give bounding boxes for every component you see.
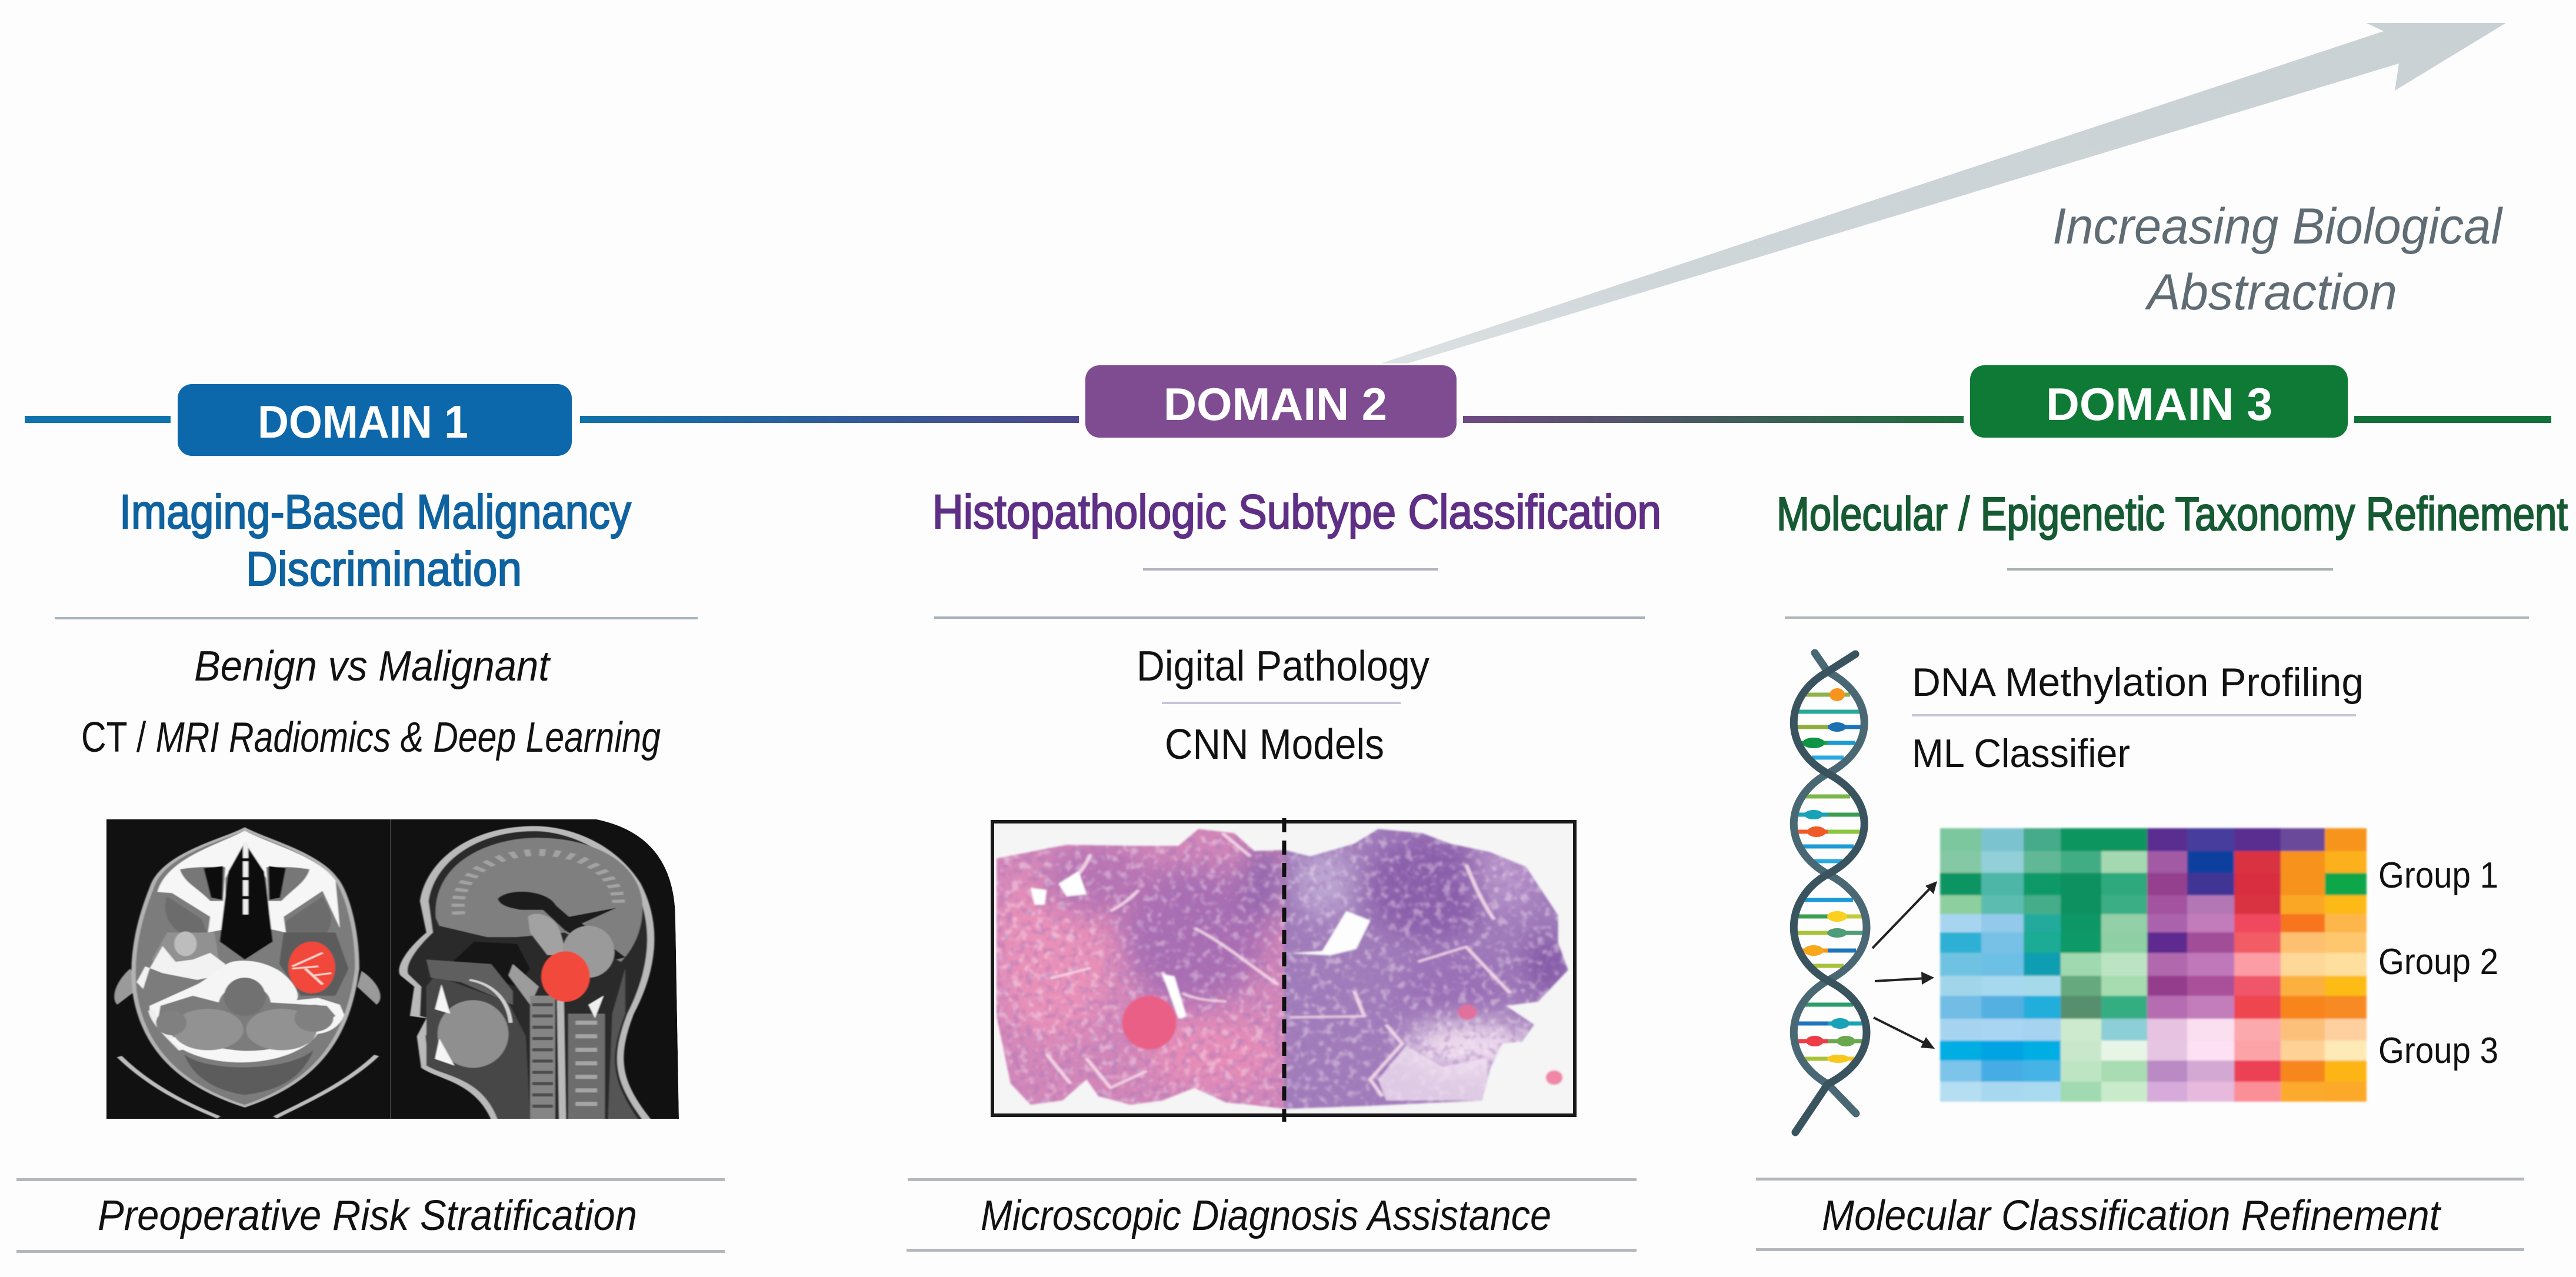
text: benign vs malignant: Benign vs Malignant — [194, 643, 551, 690]
heatmap row 8 — [1940, 976, 2367, 996]
chart: methylation heatmap — [1940, 828, 2367, 1102]
heatmap row 2 — [1940, 851, 2367, 873]
text: CT / MRI radiomics and deep learning: CT / MRI Radiomics & Deep Learning — [81, 714, 661, 761]
heading: domain 1: Imaging-Based Malignancy — [119, 485, 631, 539]
footer: domain 1: Preoperative Risk Stratification — [98, 1192, 637, 1239]
badge: domain 3 — [1970, 365, 2348, 438]
heading: domain 1 — [119, 485, 631, 596]
scan: sagittal MRI — [399, 826, 654, 1120]
red feature: stray red cells — [1546, 1071, 1562, 1085]
annotation: Increasing Biological Abstraction — [2052, 198, 2504, 321]
badge: domain 1 — [178, 384, 572, 456]
annotation: Increasing Biological Abstraction: Increasing Biological — [2052, 198, 2504, 255]
text: ML classifier: ML Classifier — [1912, 731, 2130, 776]
label: group 1: Group 1 — [2378, 855, 2498, 896]
heatmap row 13 — [1940, 1082, 2367, 1102]
heatmap row 3 — [1940, 873, 2367, 896]
red feature: small pink focus — [1458, 1005, 1477, 1020]
scan: axial CT — [114, 829, 381, 1118]
arrow: increasing abstraction — [1381, 23, 2506, 364]
heatmap row 4 — [1940, 895, 2367, 915]
red feature: large pink nodule — [1122, 996, 1177, 1049]
footer: domain 3 — [1756, 1178, 2524, 1251]
footer: domain 3: Molecular Classification Refinement — [1822, 1192, 2442, 1239]
label: group 3: Group 3 — [2378, 1031, 2498, 1071]
timeline connector — [25, 416, 2551, 423]
image: CT and MRI scans — [106, 819, 679, 1120]
tumor highlight: axial — [288, 942, 335, 993]
heatmap row 5 — [1940, 914, 2367, 933]
tumor highlight: sagittal — [541, 951, 590, 1002]
heading: domain 1: Discrimination — [246, 542, 522, 596]
badge: domain 2: DOMAIN 2 — [1164, 378, 1387, 430]
label: group 2: Group 2 — [2378, 942, 2498, 982]
footer: domain 2 — [907, 1178, 1637, 1252]
heatmap row 9 — [1940, 996, 2367, 1019]
footer: domain 1 — [16, 1178, 725, 1253]
panel: domain 3 — [1756, 365, 2568, 1251]
heatmap row 6 — [1940, 932, 2367, 953]
annotation: Increasing Biological Abstraction: Abstraction — [2144, 264, 2397, 321]
text: CNN models: CNN Models — [1165, 721, 1384, 768]
badge: domain 2 — [1085, 365, 1457, 438]
heatmap row 11 — [1940, 1041, 2367, 1061]
badge: domain 1: DOMAIN 1 — [258, 396, 468, 448]
heatmap row 10 — [1940, 1019, 2367, 1041]
arrows: DNA to heatmap — [1872, 881, 1937, 1049]
panel: domain 1 — [16, 384, 725, 1253]
heatmap row 1 — [1940, 828, 2367, 852]
text: digital pathology: Digital Pathology — [1137, 643, 1429, 690]
badge: domain 3: DOMAIN 3 — [2046, 378, 2272, 430]
heatmap row 12 — [1940, 1061, 2367, 1082]
image: histology slide — [992, 818, 1575, 1122]
icon: DNA double helix — [1791, 653, 1867, 1132]
panel: domain 2 — [907, 365, 1661, 1252]
footer: domain 2: Microscopic Diagnosis Assistance — [981, 1192, 1551, 1239]
text: DNA methylation profiling: DNA Methylation Profiling — [1912, 660, 2364, 705]
heatmap row 7 — [1940, 953, 2367, 976]
heading: domain 2: Histopathologic Subtype Classification — [932, 485, 1661, 539]
